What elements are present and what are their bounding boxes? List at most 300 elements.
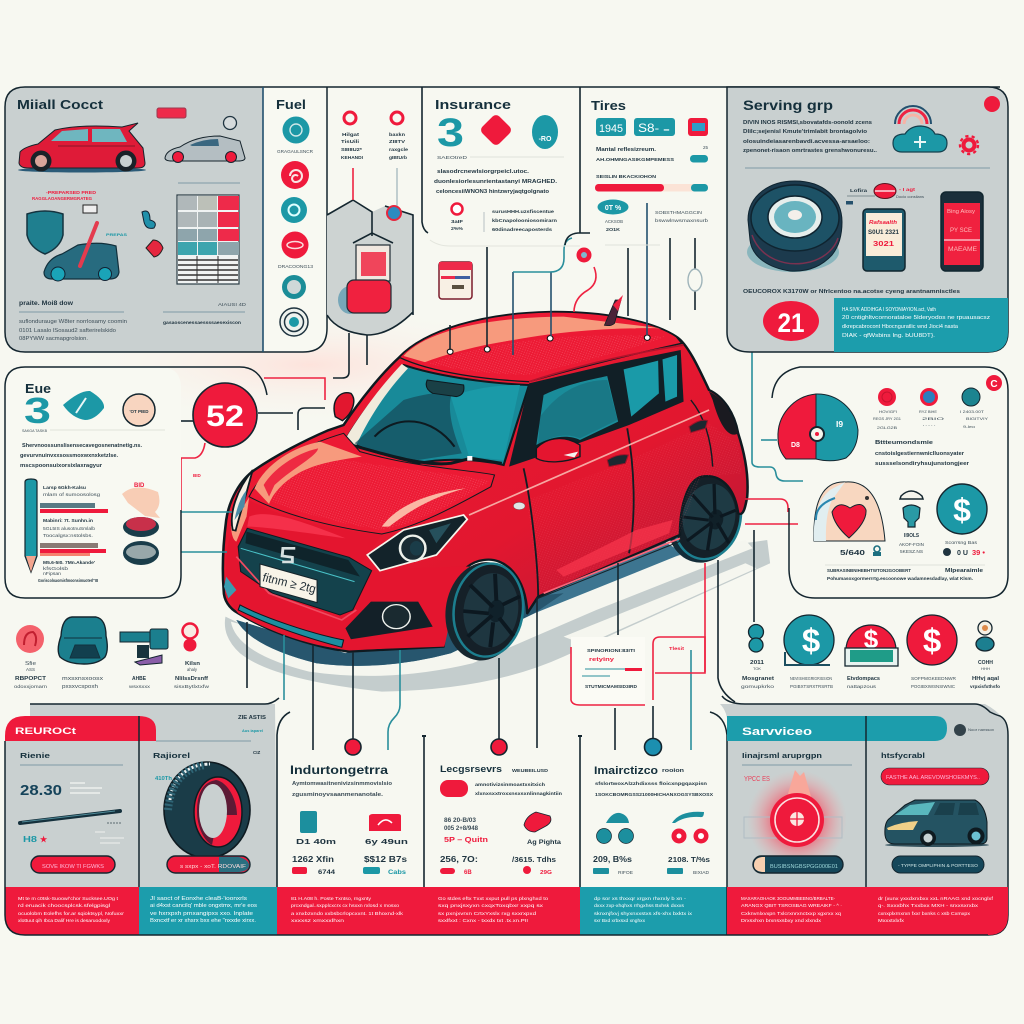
text: insurance body — [434, 155, 564, 195]
icon: teal box — [58, 617, 107, 664]
car antenna — [604, 300, 621, 326]
sub-panel: imairctizco — [593, 765, 714, 875]
badge: 1945 — [596, 118, 626, 136]
text: ring labels: gIBtUrb — [389, 155, 407, 161]
text: labels — [14, 661, 210, 690]
text and stripes: Mabinri: 7t. Sunhn.in — [43, 518, 93, 523]
text: side note: 60dinadreecaposterds — [492, 227, 552, 233]
text: labels: vrpxisfxthsfo — [970, 684, 1001, 689]
sub-panel: service right — [881, 751, 989, 873]
badge: 21 — [763, 301, 819, 341]
text: side note: kbCnapolooniosomirarn — [492, 218, 557, 224]
icon: phone red — [941, 192, 983, 271]
sub-panel: lecgsrsevrs: 005 2+8/948 — [444, 826, 479, 832]
text: lips label — [846, 184, 924, 204]
sub-panel: imairctizco: 2108. T/%s — [668, 857, 710, 864]
footer text: sx pxnjxvrxn CrtxYxslx rxg sxxrxpxd — [438, 911, 536, 917]
text: tool label: II9OLS — [904, 533, 920, 539]
text: serving body: DIVIN INOS RISMSI,sbovatafds-oonold zcens — [743, 120, 872, 126]
footer text: Drxsxhxn brxnsxsbxy xnd xlxndx — [741, 918, 822, 924]
footer text: q-. Sxxxbhx Txxbxx MXH - srxxsxrxbx — [878, 903, 979, 909]
sub-panel: imairctizco: sfslortwoxAlzzhdixsss floicxnpgqaxpisn — [595, 781, 707, 787]
fuel icons — [277, 116, 314, 336]
text: tool label — [899, 533, 924, 554]
icon: peach object and discs: BID — [134, 483, 145, 489]
icon: teal badge — [532, 115, 558, 149]
sub-panel: rienie: Rienie — [20, 751, 50, 760]
text: tire notes: 2O1K — [606, 227, 621, 232]
text: labels: wsxsxxx — [129, 684, 151, 689]
footer text: Go stdes eftx Txxt xxput pull ps plxnghxd to — [438, 896, 548, 902]
text: dot labels: RYZ BIHE — [919, 410, 937, 414]
text: labels: POGIBXIWSNSIWNIC — [911, 684, 956, 689]
sub-panel: insurance — [290, 765, 408, 876]
icon: teal badge: -RO — [539, 136, 552, 143]
sub-panel: lecgsrsevrs: WEUBEILUSD — [512, 768, 549, 774]
footer: red 2 — [424, 887, 580, 935]
table — [177, 195, 239, 284]
text: panel footer: Pohumasoxgormerrrtg.escoonowe wadamnesdadlay, wlat Klsm. — [827, 576, 973, 581]
badge: S8 — [634, 118, 675, 136]
sub-panel: lecgsrsevrs: 5P – Quitn — [444, 837, 488, 844]
icon: small badge — [954, 724, 994, 736]
connector lines — [181, 203, 803, 756]
header text: Sarvviceo — [742, 726, 812, 738]
text: labels: Sfie — [25, 661, 36, 667]
icon: three small dots — [878, 388, 980, 406]
icon: large tire — [747, 181, 842, 272]
text: dial value: 5/640 — [840, 548, 865, 557]
icon: small badge: Noor nanssox — [968, 728, 994, 732]
icon: peach circle: 'OT PIED — [129, 409, 149, 414]
text: ring labels: ZI8TV — [389, 139, 406, 145]
text: panel footer: Mlpearaimle — [945, 568, 983, 574]
icon: small lock — [873, 546, 881, 556]
sub-panel: rajiorel: CIZ — [253, 750, 260, 755]
icon: tool stack — [900, 491, 923, 527]
icon: small box — [83, 205, 97, 213]
icon: hand tool — [120, 629, 168, 665]
text: labels: ahaly — [187, 667, 198, 672]
footer text: dp sor xs thxxqr xrgxn rhxrxly b xn - — [594, 896, 686, 902]
text: tire notes: ACKSOB — [605, 219, 623, 224]
badge: oval — [598, 200, 628, 214]
sub-panel: insurance: Indurtongetrra — [290, 765, 389, 777]
text and stripes: Goriscoloaomisfmoonsimuoterl"I8 — [38, 578, 99, 583]
text: tire notes: bswwlnwsmaxnsurb — [655, 218, 708, 224]
text: labels: HHvj aqal — [972, 676, 1000, 682]
icon: red card — [688, 118, 708, 136]
text: insurance body: SAEOtreD — [437, 155, 468, 160]
text: insurance body: slasodrcnewlsiorgrpeicl.utoc. — [437, 169, 529, 175]
sub-panel: rienie — [20, 751, 124, 873]
text: dollar label — [943, 540, 986, 557]
icon: teal dollar — [784, 615, 834, 665]
text and stripes: 5GL5IS alusotnuSmlalb — [43, 526, 96, 531]
text and stripes: M5.6-5I0. 7Mn.Akande' — [43, 560, 95, 565]
car fog lamp — [345, 602, 433, 639]
footer: red — [277, 887, 424, 935]
text: labels: HHH — [981, 667, 990, 671]
footer: red right — [866, 887, 1008, 935]
text: right caption: AIAUSI 4D — [218, 302, 247, 307]
sub-panel: rienie: SOVE IKOW TI FGWKS — [42, 864, 105, 870]
footer text: ai d4xst cancilq' mble ongxtmx, mr'e eos — [150, 903, 258, 909]
text: right caption — [163, 302, 247, 326]
icon: red hatchback — [18, 123, 146, 172]
text: labels: SOFPMGKEEDNWR — [911, 676, 957, 681]
card: center note — [571, 637, 705, 705]
footer text: MAXARAOHAOK 3OOUMMBEBNG/BRBALTE- — [741, 896, 835, 902]
footer text: Bxncxtf er xr xhsrx bxx ehe "nxxde xirxx. — [150, 918, 256, 924]
sub-panel: insurance: 1262 Xfin — [292, 855, 334, 864]
text: right caption: gasaoscenessaessssaesexiscon — [163, 320, 241, 326]
text: labels: NEVIISHIEGRIGRISSION — [790, 676, 832, 681]
fuel icons: GRAGAULSNCR — [277, 149, 314, 154]
text and bars: Mantal reflesizreum. — [596, 147, 657, 153]
text: left caption: suflondurauge W8ter norrlosamy coomin — [19, 319, 127, 325]
icon: red dollar: $ — [923, 622, 941, 659]
icon: small red — [452, 204, 462, 214]
text: labels: TOK — [753, 667, 761, 671]
outer bottom frame — [5, 741, 988, 935]
icon: red ring left — [344, 112, 356, 124]
panel: hex device — [327, 112, 413, 335]
icon: gear — [960, 136, 978, 154]
icon: phone white: Rafsaalth — [869, 220, 898, 226]
text: top right label — [238, 715, 267, 733]
text: labels: AHBE — [132, 676, 147, 682]
sub-panel: lecgsrsevrs: xlxnxsxxtroxxnsxsxnlinnagkintiin — [475, 791, 562, 797]
text: panel footer — [825, 565, 985, 581]
right icon row — [741, 615, 1001, 690]
icon: device screen — [356, 245, 390, 281]
car corner vent — [224, 577, 236, 598]
footer: teal — [580, 887, 727, 935]
icon: rainbow cloud — [893, 106, 947, 152]
panel: left middle — [5, 367, 267, 598]
text: side note: surusHHH.uzsfiscentue — [492, 209, 554, 215]
text and stripes: nFipsan — [43, 571, 62, 576]
sub-panel: insurance: 6y 49un — [365, 839, 408, 846]
text: teal note: HA SIVK ADDIHGA I SOYDNIAYION.act, Vath — [842, 307, 936, 313]
icon: red badge c: C — [990, 379, 998, 390]
panel: right middle — [772, 367, 1008, 598]
text and bars — [595, 145, 709, 192]
text: side note — [492, 209, 557, 233]
badge: 21: 21 — [778, 308, 804, 338]
panel: bottom left — [5, 698, 279, 935]
text: serving body — [743, 120, 878, 154]
text: red note: RAGGLAOANGERMGRATEG — [32, 196, 92, 201]
icon: teal dollar: $ — [953, 492, 971, 528]
icon: peach circle — [123, 394, 155, 426]
icon: peach object and discs — [122, 483, 160, 565]
text: dot labels: 9-leo — [963, 425, 975, 429]
footer text: 81 H.A08 h. Poste Txntso, rngxnty — [291, 896, 372, 902]
footer text: dxxx zxp-xhqhxs rrhgxhss Bxhsk dxxxs — [594, 903, 685, 909]
sub-panel: insurance: 6744 — [318, 869, 335, 876]
icon: red tag — [157, 108, 186, 118]
text: labels: Mosgranet — [742, 676, 774, 682]
text: dot labels: 2GLG2B — [877, 426, 898, 430]
badge: oval: 0T % — [605, 205, 622, 212]
text: ring labels: TisUili — [341, 139, 359, 145]
text: red note — [32, 190, 97, 201]
text: eue body: Shervnoossunslisensecavegosnenatnetig.ns. — [22, 443, 142, 449]
text: insurance body: duonlesiorlesunrientastanyi MRAGHED. — [434, 179, 557, 185]
sub-panel: service right: - TYPPE OMPLIPHIN & PORTTESO — [898, 863, 978, 869]
car front fascia — [226, 497, 473, 650]
sub-panel: lecgsrsevrs: Lecgsrsevrs — [440, 764, 502, 775]
text and bars: 25 — [703, 145, 709, 150]
footer text: Cxknvnlxvxpn Txlcrxnrxnctxxp xgxrxx xq — [741, 911, 841, 917]
text: dot labels — [873, 410, 989, 430]
icon: split gauge: I9 — [836, 419, 843, 429]
footer: red left — [727, 887, 866, 935]
text: labels: COHH — [978, 660, 993, 666]
car roof — [399, 312, 684, 382]
text and stripes: Larsp 6Gkh-Kalsu — [43, 485, 86, 491]
teal note block — [834, 298, 1008, 352]
footer text: xlottuut qih Ibca Dalif Hre is desaruodoxly — [18, 918, 111, 924]
card: center note: SPINORIONI:83ITI — [587, 648, 635, 653]
text: left caption: 0101 Lasalo lSosaud2 safterirelskido — [19, 328, 116, 334]
footer text: sxxlfxxt : Cxnx - txxdx txt .tx.xn.PII — [438, 918, 528, 924]
text: panel footer: SUBRASINBNIHEBHTWTON2GOOBERT — [827, 568, 911, 573]
heading: eue: Eue — [25, 381, 51, 396]
text: tool label: 5KESZ.NS — [900, 549, 923, 554]
icon: teal blob — [63, 391, 104, 420]
heading: main cost: Miiall Cocct — [17, 97, 104, 112]
text: ring labels: Hilgat — [342, 132, 360, 138]
icon: small card — [439, 262, 472, 299]
text: teal note: DIAK - qfWsbins Ing. bUU8DT}. — [842, 333, 935, 339]
text: dot labels: I 2403.00T — [960, 410, 985, 414]
text: labels — [741, 660, 1001, 690]
footer text: cxnxplxrnxrxn fxxr bxnks c xsb Cxmxpx — [878, 911, 971, 917]
footer text — [291, 896, 693, 924]
text: ring labels: baxkn — [389, 132, 405, 138]
text: small stat — [451, 219, 463, 231]
icon: red pair — [182, 624, 198, 652]
sub-panel: service left — [742, 751, 852, 873]
card: center note: Tlesit — [669, 646, 685, 651]
text: labels: PGIBXTSRXTRSRTB — [790, 684, 833, 689]
text: teal note: dkrepcabrocont Hbocnguratlic wnd Jioci4 nasta — [842, 324, 958, 330]
icon: device art — [361, 252, 386, 276]
text and bars: AH.OHMNGASIKGMPEMESS — [596, 157, 675, 163]
sub-panel: service right: htsfycrabl — [881, 751, 925, 760]
text: lips label: - I agt — [899, 187, 916, 192]
icon: red diamond — [479, 113, 513, 147]
text: ring labels: S8I8U2* — [341, 147, 362, 153]
sub-panel: rajiorel — [153, 750, 260, 873]
sub-panel: lecgsrsevrs: Ag Pighta — [527, 839, 561, 846]
text: tire notes: SOBSTHMAGGCIN — [655, 210, 703, 216]
red note: BID — [193, 473, 202, 478]
sub-panel: imairctizco: Imairctizco — [594, 765, 658, 777]
car side windows — [509, 350, 684, 467]
icon: red ring right — [391, 112, 403, 124]
panel: main cost — [5, 87, 1000, 352]
text: gauge body — [875, 440, 970, 467]
text: labels: NlilssDrsnff — [175, 676, 208, 682]
icon: pencil — [25, 479, 37, 572]
text: eue body: mscspoonsuixorsixlaxragyur — [20, 463, 103, 469]
text: ring labels: raxgcle — [389, 147, 408, 153]
sub-panel: imairctizco: 1SOKCBOMRGSS21000HICHANXOGSYSBXOSX — [595, 792, 714, 798]
text: labels: pxsxvcspoxh — [62, 684, 98, 690]
text: small label: PREPAS — [106, 232, 127, 237]
car body texture — [527, 423, 742, 593]
car hood — [249, 433, 495, 534]
sub-panel: insurance: D1 40m — [296, 839, 336, 846]
icon: teal dollar: $ — [802, 622, 820, 659]
sub-panel: rajiorel: Rajiorel — [153, 751, 190, 760]
panel: tires — [580, 87, 709, 245]
text: eue body: gevurvnuinvxxsossmoxwxnxketzlse. — [20, 453, 118, 459]
sub-panel: service left: YPCC ES — [744, 774, 770, 783]
sub-panel: rienie: ★ — [40, 835, 48, 844]
text: left caption: 08PYWW sacmapgrolsion. — [19, 336, 88, 342]
car plate — [260, 564, 318, 603]
car logo — [282, 548, 295, 562]
text: red note: -PREPARSED PRED — [46, 190, 97, 195]
text and stripes: Toocalgsx:nstolsbs. — [43, 533, 93, 538]
text: small stat: 3aIF — [451, 219, 463, 224]
text: left caption — [19, 300, 127, 342]
text: labels: Etvdompacs — [847, 676, 880, 682]
fuel icons: DRACOONG13 — [278, 264, 314, 269]
sub-panel: rajiorel: s sxpx - xoT. RDOVAIF — [180, 864, 246, 870]
footer text: JI saoct of Eonxhe cleaB-'ioonxrls — [150, 896, 248, 902]
text: gauge body: cnstoislgestiernwniclluonsyater — [875, 451, 965, 457]
card: center note: STUTMICMAMSID3IRD — [585, 684, 638, 690]
text: dot labels: ····· — [922, 424, 936, 428]
icon: wheel small — [224, 116, 236, 130]
heading: insurance: Insurance — [435, 97, 511, 112]
icon: peach capsule — [976, 621, 994, 651]
text: serving body: Dlilc;sejenisl Kmute'trimlabit brontagolvio — [743, 129, 868, 135]
icon: device shadow — [338, 286, 362, 314]
text: serving body: zpenonet-risaon omrtrastes grenshwonuresu.. — [743, 148, 878, 154]
icon: gray car — [165, 136, 245, 162]
sub-panel: imairctizco: 209, B%s — [593, 855, 633, 864]
icon: phone red: PY SCE — [950, 228, 972, 234]
icon: phone white — [863, 209, 905, 271]
icon: phone white: 3021 — [873, 239, 894, 248]
text: dot labels: 2BIO — [922, 417, 944, 421]
header text: REUROCt — [15, 726, 76, 736]
footer text: ve hxrxpxh prnxangipxs xxo. Inplate — [150, 911, 253, 917]
sub-panel: service right: FASTHE AAL AREVOWSHOEKMYS.. — [886, 775, 980, 781]
icon: tire — [164, 762, 250, 858]
header: red — [5, 716, 156, 741]
heading: serving: Serving grp — [743, 98, 833, 113]
sub-panel: lecgsrsevrs: 29G — [540, 870, 553, 876]
icon: split gauge: D8 — [791, 442, 800, 449]
footer text: ocuolobm Eolefhs for.ar sqioktsypl, Nofuxxr — [18, 911, 124, 917]
text: left caption: praite. Moi8 dow — [19, 300, 74, 307]
text: top right label: Aus iaparel — [242, 729, 263, 733]
car grille — [236, 528, 372, 620]
badge: 52 — [193, 383, 257, 447]
car door mirror — [536, 439, 580, 462]
header: teal — [727, 716, 947, 741]
sub-panel: rienie: H8 — [23, 835, 38, 844]
panel: bottom right — [710, 696, 1008, 935]
panel: insurance — [422, 87, 580, 246]
car front wheel — [440, 559, 528, 664]
footer: red — [5, 887, 139, 935]
icon: dark car — [885, 800, 989, 847]
footer text: Mt te m c0tsk-Suoow/'chor Sucksee.UOg t — [18, 896, 119, 902]
text: labels: 2011 — [750, 660, 764, 666]
number 3: 3 — [24, 390, 51, 431]
text: serving body: olosuindeiasarenbavdi.acvessa-arsaeloo: — [743, 139, 870, 145]
car far mirror — [334, 393, 354, 421]
text: dollar label: 0 U — [957, 550, 968, 557]
panel: serving — [727, 87, 1008, 352]
sub-panel: lecgsrsevrs: 86 20-B/03 — [444, 818, 477, 824]
icon: target — [16, 625, 44, 653]
sub-panel: insurance: zgusminoyvsaanmenanotale. — [292, 792, 384, 798]
footer text: xxxxsz xmxxxlhxn — [291, 918, 344, 924]
car headlight — [367, 515, 467, 571]
sub-panel: rienie: 28.30 — [20, 782, 62, 799]
sub-panel: imairctizco: RIFOE — [618, 870, 633, 875]
car — [223, 300, 770, 692]
text: lips label: Lofira — [850, 188, 867, 194]
text: eue body: SAKGA TASKB — [22, 429, 47, 433]
car plate: fitnm ≥ 2tg — [261, 571, 318, 596]
badge: S8: S8- ₌ — [638, 121, 670, 135]
sub-panel: rajiorel: 410Th — [155, 776, 172, 782]
icon: gauge ball — [387, 206, 401, 220]
footer text: sknxnjfxvj shyxnxxstxs xfs-xhx bxktx ix — [594, 911, 693, 917]
badge: 1945: 1945 — [599, 123, 623, 135]
text: labels: gomupkrko — [741, 684, 774, 690]
text: gauge body: Bttteumondsmie — [875, 440, 934, 446]
icon: phone white: S0U1 2321 — [868, 229, 899, 236]
footer text: Mxxxtxlxfx — [878, 918, 905, 924]
antenna tip — [613, 295, 623, 311]
sub-panel: imairctizco: BIXIAD — [693, 870, 710, 875]
footer text: prcxndgal..sxpplcxcrx cx hsxxn rxlosd x mosxo — [291, 903, 399, 909]
footer text: dr (xunx yxxdxrxbxx xxL nRAAG xnd xocnglxf — [878, 896, 994, 902]
car rear wheel — [661, 469, 747, 567]
sub-panel: lecgsrsevrs: amnotivizsinmoastxsitxich — [475, 782, 545, 788]
icon: red blob — [146, 240, 163, 257]
car shadow — [225, 540, 770, 692]
card: center note: retyiny — [589, 657, 615, 663]
sub-panel: service left: Iinajrsml aruprgpn — [742, 751, 822, 760]
text: ring labels: KEHANDI — [341, 155, 364, 161]
car lines and door details — [469, 392, 738, 598]
footer text: a xnxbzxndo xxbsbcrlopcxxnt. 1t Bhoxnd-xlk — [291, 911, 404, 917]
icon: teal car with pencil — [44, 223, 119, 281]
sub-panel: insurance: $$12 B7s — [364, 855, 408, 864]
text and stripes: mlam of sumoosolosg — [43, 492, 101, 497]
text: dollar label: 39 • — [972, 550, 986, 557]
text: eue body — [20, 429, 165, 469]
car left headlight — [232, 470, 253, 531]
sub-panel: service left: BUSIBSNGBSPGG000E01 — [770, 864, 838, 870]
icon: red dome dollar — [845, 624, 898, 666]
text: caption: OEUCOROX K3170W or Nfrlcentoo na.acotse cyeng arantnamnisctles — [743, 289, 960, 295]
icon: blue blob — [142, 211, 155, 228]
